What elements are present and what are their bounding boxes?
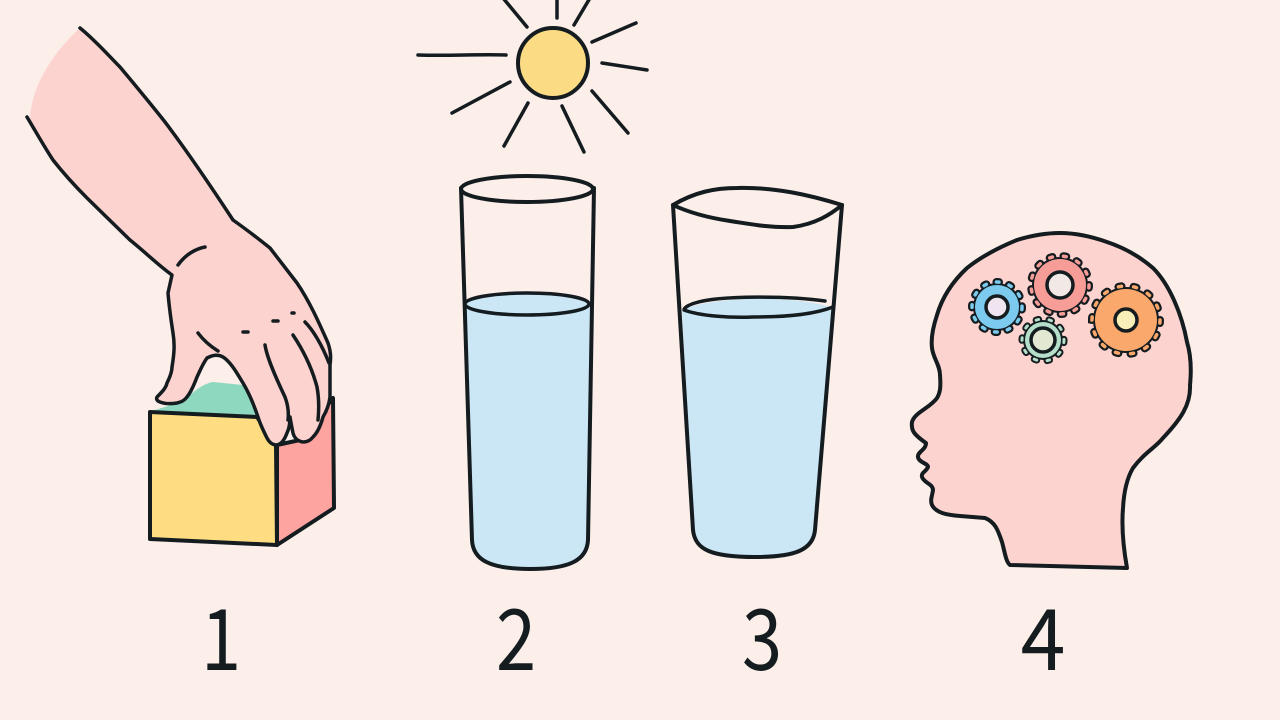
icon: sun bbox=[418, 0, 647, 152]
icon: glass 3 bbox=[673, 188, 842, 557]
water bbox=[465, 295, 591, 569]
rim bbox=[461, 176, 593, 202]
gear: red bbox=[1031, 256, 1089, 314]
gear: green bbox=[1022, 319, 1064, 361]
glass body bbox=[461, 188, 594, 569]
hand and arm outline bbox=[27, 28, 331, 445]
glass body bbox=[673, 205, 842, 557]
number 4: 4 bbox=[1021, 572, 1065, 695]
water bbox=[682, 299, 833, 557]
number 1: 1 bbox=[201, 571, 241, 695]
gear: orange bbox=[1092, 286, 1160, 354]
water surface bbox=[684, 297, 833, 317]
icon: hand on block bbox=[27, 28, 334, 545]
finger creases bbox=[178, 247, 329, 420]
rim bbox=[673, 188, 842, 227]
gear: blue bbox=[972, 282, 1022, 332]
hand and arm fill bbox=[30, 28, 331, 445]
block: right face bbox=[277, 398, 334, 545]
number 2: 2 bbox=[496, 571, 536, 695]
block: top face bbox=[152, 382, 292, 425]
sun rays bbox=[418, 0, 647, 152]
water surface bbox=[465, 293, 589, 315]
icon: glass 2 bbox=[461, 176, 594, 569]
icon: head with gears bbox=[912, 233, 1191, 568]
block: front face bbox=[150, 412, 277, 545]
head bbox=[912, 233, 1191, 568]
sun disc bbox=[518, 28, 588, 98]
number 3: 3 bbox=[742, 571, 782, 695]
